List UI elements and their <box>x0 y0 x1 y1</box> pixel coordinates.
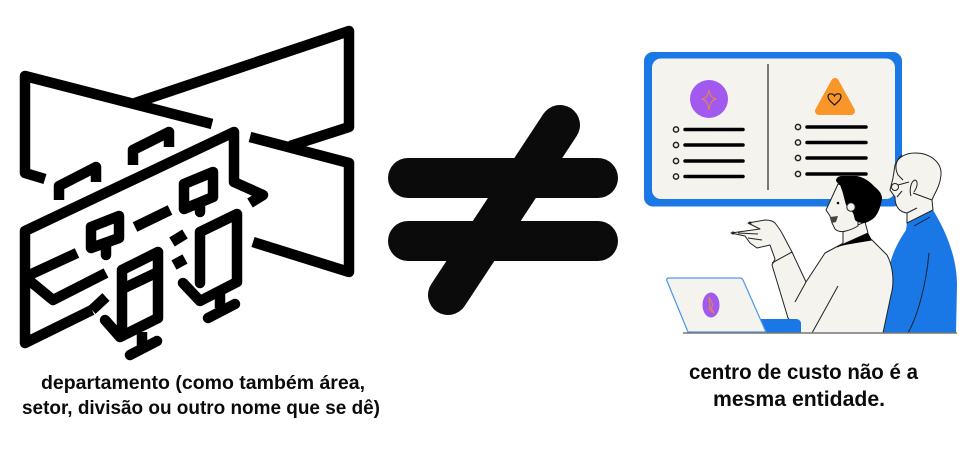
illustration: presentation board with two people <box>644 52 957 333</box>
caption: departamento: departamento (como também área, <box>41 373 365 394</box>
collar <box>837 233 872 247</box>
icon: not-equal sign <box>408 125 598 295</box>
right list <box>795 124 866 177</box>
neck <box>837 222 868 247</box>
caption: centro de custo <box>689 361 918 411</box>
face <box>826 184 858 232</box>
left list <box>673 127 743 179</box>
ear <box>847 203 855 211</box>
icon: orange triangle with heart <box>819 82 851 111</box>
desk line <box>683 332 957 334</box>
board surface <box>652 58 895 199</box>
icon: department office layout <box>25 31 349 355</box>
icon: purple circle with star <box>690 80 728 118</box>
board frame <box>644 52 902 206</box>
caption: departamento <box>22 373 380 419</box>
hair <box>836 176 882 223</box>
caption: departamento: setor, divisão ou outro nome que se dê) <box>22 398 380 419</box>
board divider <box>767 64 769 190</box>
man in white jacket <box>731 176 893 333</box>
laptop <box>667 278 801 333</box>
caption: centro de custo: centro de custo não é a <box>689 361 918 384</box>
older man in blue <box>883 153 957 333</box>
caption: centro de custo: mesma entidade. <box>713 388 885 411</box>
